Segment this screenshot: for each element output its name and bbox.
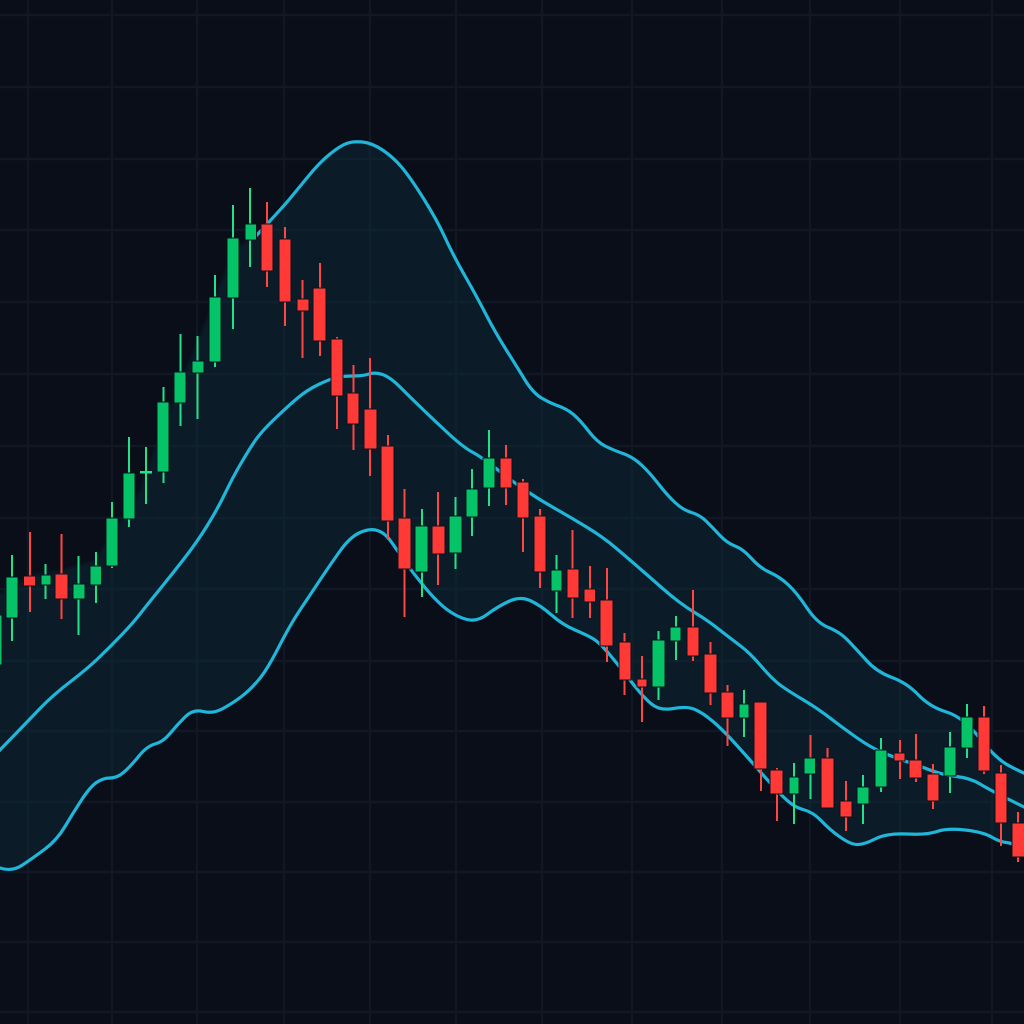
candle 5 [55, 534, 68, 619]
candle 21 [331, 337, 343, 429]
candle 52 [857, 775, 869, 824]
candle 27 [432, 492, 445, 585]
candle 24 [381, 435, 394, 540]
candle 50 [821, 748, 834, 808]
candle 23 [364, 358, 377, 476]
candle 47 [770, 768, 783, 821]
candle 4 [41, 564, 51, 599]
candle 32 [517, 479, 529, 552]
candle 12 [174, 334, 186, 426]
candle 17 [261, 202, 273, 287]
candle 8 [106, 502, 118, 568]
candle 15 [227, 205, 239, 329]
candle 49 [804, 735, 816, 799]
candle 57 [944, 732, 956, 793]
candle 28 [449, 497, 462, 569]
lower band line [0, 530, 1024, 869]
candle 39 [637, 656, 647, 722]
candle 16 [245, 188, 256, 267]
candle 59 [978, 706, 990, 774]
candle 56 [927, 764, 939, 809]
candle 61 [1012, 812, 1024, 862]
candle 22 [347, 365, 359, 450]
candle 18 [279, 227, 291, 326]
candle 9 [123, 437, 135, 527]
candle 40 [652, 631, 665, 700]
candle 53 [875, 738, 887, 792]
candle 37 [600, 568, 613, 662]
candle 34 [551, 555, 562, 613]
candle 29 [466, 469, 478, 536]
upper band line [256, 142, 1024, 774]
candle 48 [789, 763, 799, 824]
candle 6 [73, 556, 85, 635]
candle 44 [721, 685, 734, 746]
candle 25 [398, 489, 411, 617]
candle 60 [995, 765, 1007, 846]
candle 1 [0, 615, 2, 665]
candle 2 [6, 555, 18, 641]
candlestick series [0, 188, 1024, 862]
candle 35 [567, 530, 579, 618]
candle 26 [415, 509, 428, 597]
candle 10 [140, 447, 152, 504]
candle 43 [704, 642, 717, 705]
candle 7 [90, 552, 102, 603]
candle 36 [584, 566, 596, 618]
candle 14 [209, 275, 221, 367]
candle 54 [894, 740, 905, 779]
candle 41 [670, 616, 681, 660]
candle 30 [483, 430, 495, 506]
candle 19 [297, 280, 309, 358]
candle 55 [909, 734, 922, 782]
candle 11 [157, 387, 169, 483]
candle 31 [500, 445, 512, 505]
candle 45 [739, 690, 749, 737]
candle 42 [687, 590, 699, 661]
band fill area [0, 142, 1024, 869]
candle 58 [961, 704, 973, 758]
candle 20 [313, 263, 326, 356]
candle 51 [840, 781, 852, 831]
candle 3 [24, 532, 36, 612]
candle 38 [619, 633, 631, 695]
middle band line [0, 373, 1024, 808]
candle 13 [192, 336, 204, 419]
candle 33 [534, 509, 546, 588]
candle 46 [754, 702, 767, 791]
